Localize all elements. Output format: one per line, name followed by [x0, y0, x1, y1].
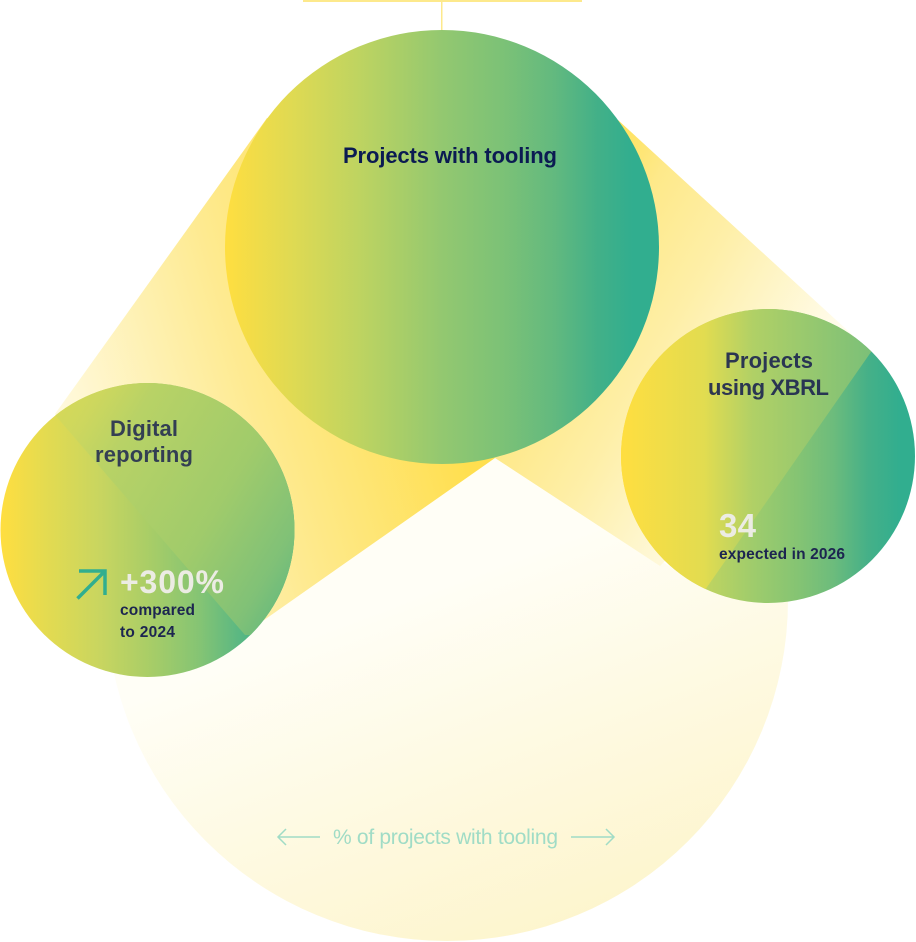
label: expected in 2026: expected in 2026 [719, 546, 845, 563]
stat: +300%: +300% [120, 564, 224, 600]
connector: big circle to digital reporting [55, 118, 495, 632]
connector: big circle to XBRL projects [442, 120, 871, 566]
heading: digital reporting: reporting [95, 442, 193, 467]
stem line [441, 2, 442, 31]
circle: projects with tooling [225, 30, 659, 464]
heading: projects using XBRL: using XBRL [708, 375, 829, 400]
stat: 34: 34 [719, 507, 757, 544]
icon: up-right arrow [78, 571, 105, 598]
arrow: left [278, 829, 320, 845]
label: compared to 2024: compared [120, 602, 195, 619]
circle: digital reporting [0, 383, 294, 677]
pale base circle [114, 458, 788, 941]
arrow: right [571, 829, 614, 845]
heading: digital reporting: Digital [110, 416, 178, 441]
caption text: % of projects with tooling [333, 826, 558, 849]
circle: projects using XBRL [621, 309, 915, 603]
heading: projects with tooling: Projects with tooling [343, 143, 557, 168]
heading: projects using XBRL: Projects [725, 348, 813, 373]
axis caption [278, 826, 614, 849]
label: compared to 2024: to 2024 [120, 624, 175, 641]
top bar [303, 0, 582, 2]
